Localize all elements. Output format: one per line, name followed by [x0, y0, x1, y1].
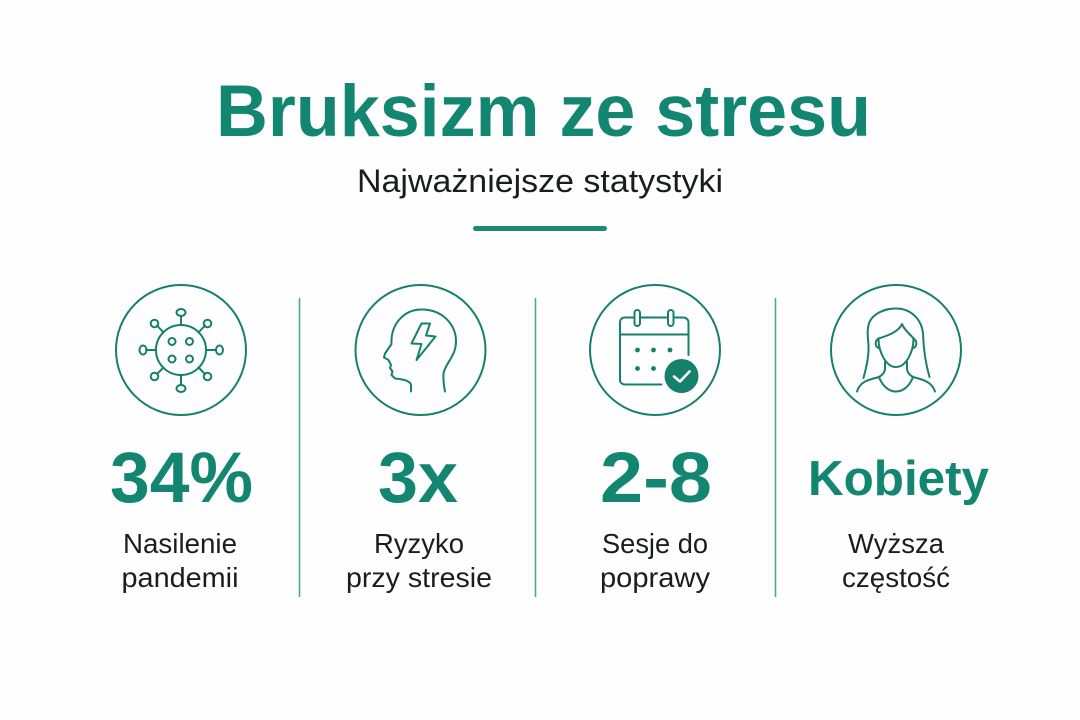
label: pandemic severity: pandemii [122, 562, 238, 593]
label: higher frequency: częstość [842, 562, 950, 593]
panel: stress risk stat [346, 285, 492, 593]
label: risk under stress: przy stresie [346, 562, 492, 593]
title underline [473, 226, 607, 231]
label: sessions to improvement [600, 528, 710, 593]
subtitle: Najważniejsze statystyki [357, 163, 723, 199]
label: risk under stress [346, 528, 492, 593]
icon: virus [116, 285, 246, 415]
label: pandemic severity [122, 528, 238, 593]
icon: head with lightning bolt [356, 285, 486, 415]
stat: 3x: 3x [378, 439, 458, 518]
stat: 2-8: 2-8 [600, 439, 712, 518]
label: sessions to improvement: Sesje do [602, 528, 708, 559]
panel: women stat [808, 285, 989, 593]
icon: woman portrait [831, 285, 961, 415]
column dividers [300, 298, 776, 597]
panel: sessions stat [590, 285, 720, 593]
label: higher frequency [842, 528, 950, 593]
label: pandemic severity: Nasilenie [123, 528, 237, 559]
label: risk under stress: Ryzyko [374, 528, 464, 559]
icon: calendar with check badge [590, 285, 720, 415]
stat: 34%: 34% [110, 439, 253, 518]
label: sessions to improvement: poprawy [600, 562, 710, 593]
panel: pandemic stat [110, 285, 253, 593]
label: higher frequency: Wyższa [848, 528, 944, 559]
stat: Kobiety: Kobiety [808, 452, 989, 506]
title: Bruksizm ze stresu [216, 71, 871, 152]
